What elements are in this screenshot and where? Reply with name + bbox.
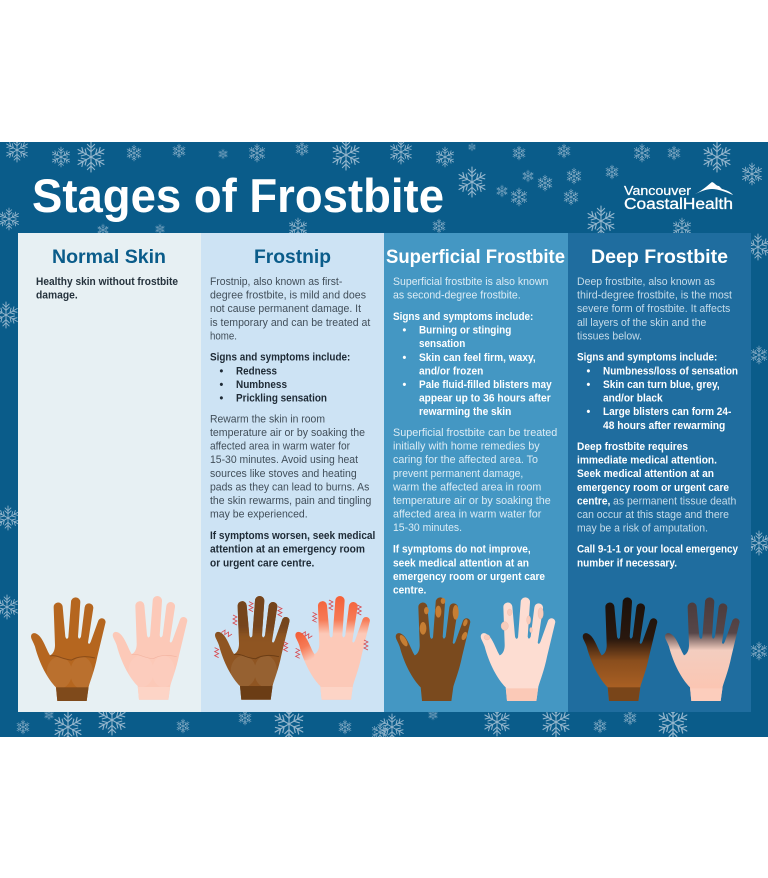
list: superficial signs and symptoms: rewarming the skin <box>419 406 511 418</box>
icon: pale hand frostnip with red fingertips <box>295 596 370 700</box>
text: deep medical attention <box>577 441 736 535</box>
text: frostnip treatment <box>210 413 371 521</box>
text: superficial treatment <box>392 427 557 534</box>
icon: brown hand with blisters <box>396 597 470 701</box>
list: deep signs and symptoms: Skin can turn blue, grey, <box>603 379 720 391</box>
text: superficial treatment: warm the affected area in room <box>392 481 541 493</box>
list: deep signs and symptoms: • <box>586 379 590 391</box>
callout: frostnip seek attention: If symptoms worsen, seek medical <box>210 530 375 542</box>
list: frostnip signs and symptoms: Numbness <box>236 379 287 391</box>
text: frostnip treatment: the skin rewarms, pain and tingling <box>210 495 371 507</box>
text: superficial description: Superficial frostbite is also known <box>393 276 548 288</box>
list: superficial signs and symptoms: sensation <box>419 338 465 350</box>
list: superficial signs and symptoms: Pale fluid-filled blisters may <box>419 379 552 391</box>
icon: brown hand frostnip <box>215 596 290 700</box>
text: deep medical attention: as permanent tissue death <box>613 495 736 507</box>
list: deep signs and symptoms: Signs and symptoms include: <box>577 352 717 364</box>
text: deep medical attention: Deep frostbite requires <box>577 441 688 453</box>
list: superficial signs and symptoms: Skin can feel firm, waxy, <box>419 352 536 364</box>
list: superficial signs and symptoms: appear up to 36 hours after <box>419 393 551 405</box>
panel: deep frostbite <box>568 233 751 712</box>
list: deep signs and symptoms: and/or black <box>603 393 664 405</box>
list: frostnip signs and symptoms: Redness <box>236 365 277 377</box>
list: superficial signs and symptoms: and/or frozen <box>419 365 483 377</box>
text: superficial treatment: 15-30 minutes. <box>393 522 462 534</box>
text: deep medical attention: immediate medical attention. <box>577 455 717 467</box>
list: frostnip signs and symptoms: • <box>220 379 224 391</box>
banner background <box>0 142 768 737</box>
icon: brown hand deep frostbite <box>583 597 657 704</box>
list: superficial signs and symptoms: • <box>402 352 406 364</box>
text: superficial treatment: Superficial frostbite can be treated <box>393 427 557 439</box>
text: deep description: Deep frostbite, also known as <box>577 276 716 288</box>
heading: normal skin: Normal Skin <box>52 247 166 268</box>
list: superficial signs and symptoms <box>393 311 552 418</box>
text: deep description: third-degree frostbite, is the most <box>577 290 732 302</box>
panel: superficial frostbite <box>384 233 568 712</box>
icon: red tingling marks <box>215 600 368 658</box>
text: deep medical attention: Seek medical attention at an <box>577 468 714 480</box>
text: superficial treatment: prevent permanent damage, <box>393 468 523 480</box>
callout: frostnip seek attention <box>210 530 375 569</box>
text: frostnip treatment: may be experienced. <box>210 509 308 521</box>
text: deep description <box>577 276 732 342</box>
text: superficial treatment: initially with home remedies by <box>393 441 540 453</box>
list: frostnip signs and symptoms: Prickling sensation <box>236 393 327 405</box>
list: superficial signs and symptoms: • <box>402 325 406 337</box>
text: frostnip treatment: Rewarm the skin in room <box>210 413 325 425</box>
list: frostnip signs and symptoms: • <box>220 393 224 405</box>
panel: frostnip <box>201 233 384 712</box>
text: deep medical attention: centre, <box>577 495 610 507</box>
callout: superficial seek attention: If symptoms do not improve, <box>393 544 531 556</box>
list: deep signs and symptoms: Numbness/loss of sensation <box>603 365 738 377</box>
list: frostnip signs and symptoms: • <box>220 365 224 377</box>
snowflake pattern <box>0 138 768 742</box>
text: normal skin description <box>36 276 178 302</box>
text: frostnip description: Frostnip, also known as first- <box>210 276 343 288</box>
list: deep signs and symptoms: 48 hours after rewarming <box>603 420 725 432</box>
text: deep description: tissues below. <box>577 330 642 342</box>
list: frostnip signs and symptoms <box>210 352 350 405</box>
list: deep signs and symptoms: • <box>586 365 590 377</box>
callout: superficial seek attention: emergency room or urgent care <box>393 571 545 583</box>
text: superficial description: as second-degree frostbite. <box>393 290 521 302</box>
text: superficial treatment: affected area in warm water for <box>393 509 542 521</box>
text: frostnip treatment: sources like stoves and heating <box>210 468 357 480</box>
callout: call 9-1-1 <box>577 544 738 569</box>
list: frostnip signs and symptoms: Signs and symptoms include: <box>210 352 350 364</box>
list: superficial signs and symptoms: Signs and symptoms include: <box>393 311 533 323</box>
text: superficial description <box>393 276 548 302</box>
callout: superficial seek attention: seek medical attention at an <box>393 557 529 569</box>
callout: superficial seek attention: centre. <box>393 584 426 596</box>
text: deep description: severe form of frostbite. It affects <box>577 303 731 315</box>
text: deep description: all layers of the skin and the <box>577 317 706 329</box>
logo: Vancouver Coastal Health <box>624 182 733 213</box>
title: Stages of Frostbite <box>32 169 444 222</box>
icon: brown hand healthy <box>31 597 106 704</box>
text: superficial treatment: temperature air or by soaking the <box>393 495 551 507</box>
text: frostnip treatment: temperature air or by soaking the <box>210 427 365 439</box>
text: deep medical attention: may be a risk of amputation. <box>577 523 708 535</box>
text: frostnip treatment: affected area in warm water for <box>210 441 350 453</box>
panel: normal skin <box>18 233 201 712</box>
heading: frostnip: Frostnip <box>254 247 331 268</box>
list: deep signs and symptoms: • <box>586 406 590 418</box>
callout: call 9-1-1: Call 9-1-1 or your local emergency <box>577 544 738 556</box>
callout: frostnip seek attention: or urgent care centre. <box>210 557 314 569</box>
heading: superficial frostbite: Superficial Frostbite <box>386 247 565 268</box>
text: frostnip description: degree frostbite, is mild and does <box>210 290 367 302</box>
callout: frostnip seek attention: attention at an emergency room <box>210 544 365 556</box>
logo: Vancouver Coastal Health: Vancouver <box>624 183 692 198</box>
text: frostnip description: is temporary and can be treated at <box>210 317 370 329</box>
list: deep signs and symptoms: Large blisters can form 24- <box>603 406 732 418</box>
heading: deep frostbite: Deep Frostbite <box>591 247 728 268</box>
callout: call 9-1-1: number if necessary. <box>577 557 677 569</box>
text: deep medical attention: can occur at this stage and there <box>577 509 729 521</box>
text: frostnip description <box>210 276 370 342</box>
logo: Vancouver Coastal Health: CoastalHealth <box>624 196 733 213</box>
text: normal skin description: Healthy skin without frostbite <box>36 276 178 288</box>
text: frostnip treatment: 15-30 minutes. Avoid using heat <box>210 454 358 466</box>
icon: pale hand healthy <box>113 596 187 704</box>
text: normal skin description: damage. <box>36 290 78 302</box>
icon: pale hand deep frostbite <box>665 597 740 705</box>
callout: superficial seek attention <box>393 544 545 596</box>
list: superficial signs and symptoms: Burning or stinging <box>419 325 511 337</box>
icon: pale hand with blisters <box>481 597 555 705</box>
text: frostnip description: not cause permanent damage. It <box>210 303 361 315</box>
list: superficial signs and symptoms: • <box>402 379 406 391</box>
list: deep signs and symptoms <box>577 352 738 432</box>
text: superficial treatment: caring for the affected area. To <box>393 454 538 466</box>
text: frostnip treatment: pads as they can lead to burns. As <box>210 481 370 493</box>
text: frostnip description: home. <box>210 330 237 342</box>
text: deep medical attention: emergency room or urgent care <box>577 482 729 494</box>
